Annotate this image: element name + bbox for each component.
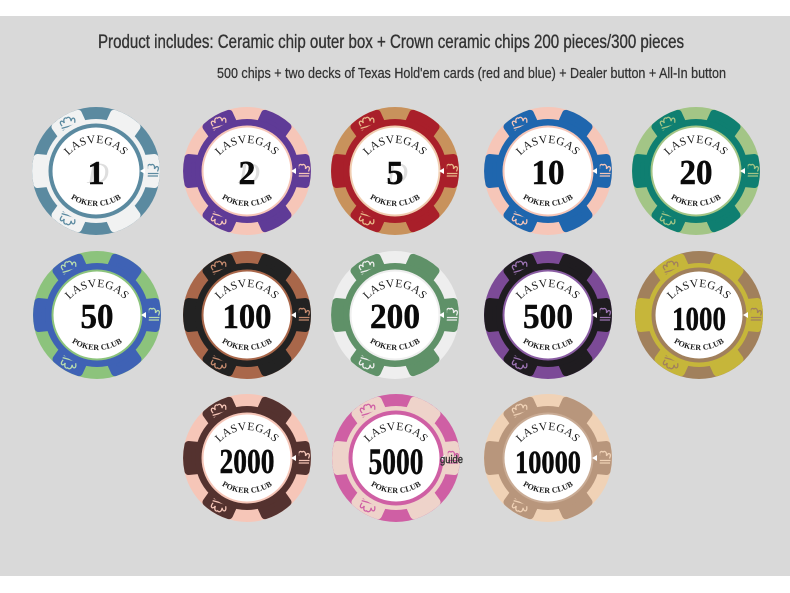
chip: 1: POKER CLUB (70, 194, 121, 206)
chip: 1: D (86, 157, 109, 190)
chip: 20 (632, 107, 760, 235)
chip: 2000: 2000 (220, 442, 274, 481)
chip: 2000 (183, 394, 311, 522)
chip: 10 (484, 107, 612, 235)
chip: 10: POKER CLUB (522, 194, 573, 206)
chip: 1000: 1000 (672, 301, 726, 338)
chip: 100 (183, 251, 311, 379)
chip: 500 (484, 251, 612, 379)
chip: 500: 500 (523, 297, 573, 336)
chip: 1 (32, 107, 160, 235)
chip: 20: 20 (680, 153, 712, 192)
chip: 200: 200 (370, 297, 420, 336)
chip: 5 (331, 107, 459, 235)
chip: 5000: 5000 (368, 442, 424, 483)
chip: 20: LASVEGAS (664, 135, 728, 156)
chip: 2: POKER CLUB (222, 194, 272, 206)
chip: 50: POKER CLUB (72, 338, 122, 350)
chip: 50: LASVEGAS (64, 279, 129, 300)
chip: 2000: LASVEGAS (214, 422, 279, 442)
chip: 1: 1 (88, 155, 104, 192)
chip: 2000: POKER CLUB (222, 480, 272, 494)
chip: 10: LASVEGAS (516, 135, 580, 156)
chip: 5000: LASVEGAS (364, 422, 428, 442)
chip: 500: LASVEGAS (516, 279, 580, 300)
chip: 5000: POKER CLUB (370, 480, 421, 494)
chip: 2: LASVEGAS (214, 135, 279, 156)
subtitle: 500 chips + two decks of Texas Hold'em cards (red and blue) + Dealer button + All-In button (217, 66, 726, 82)
chip: 20: POKER CLUB (670, 194, 721, 206)
chip: 2 (183, 107, 311, 235)
chip: 5: LASVEGAS (362, 135, 427, 156)
chip: 2: 2 (238, 155, 256, 192)
chip: 2: D (237, 157, 260, 190)
chip: 5: 5 (386, 155, 404, 192)
chip: 200 (331, 251, 459, 379)
chip: 200: LASVEGAS (362, 279, 427, 300)
chip: 50: 50 (80, 297, 114, 336)
chip: 5: D (385, 157, 408, 190)
chip: 10: 10 (532, 153, 564, 192)
chip: 50 (33, 251, 161, 379)
chip: 10000: POKER CLUB (522, 480, 573, 494)
chip: 5000 (332, 394, 460, 522)
label: guide: guide (440, 454, 463, 466)
chip: 1000: POKER CLUB (674, 338, 724, 350)
chip: 1000 (635, 251, 763, 379)
chip: 1: LASVEGAS (64, 135, 128, 156)
chip: 1000: LASVEGAS (666, 279, 731, 300)
chip: 100: LASVEGAS (214, 279, 279, 300)
chip: 5: POKER CLUB (370, 194, 420, 206)
chip: 10000: 10000 (515, 445, 581, 481)
chip: 10000: LASVEGAS (516, 422, 580, 442)
chip: 200: POKER CLUB (370, 338, 420, 350)
chip: 10000 (484, 394, 612, 522)
chip: 100: 100 (222, 297, 272, 336)
chip: 100: POKER CLUB (222, 338, 272, 350)
chip: 500: POKER CLUB (522, 338, 573, 350)
